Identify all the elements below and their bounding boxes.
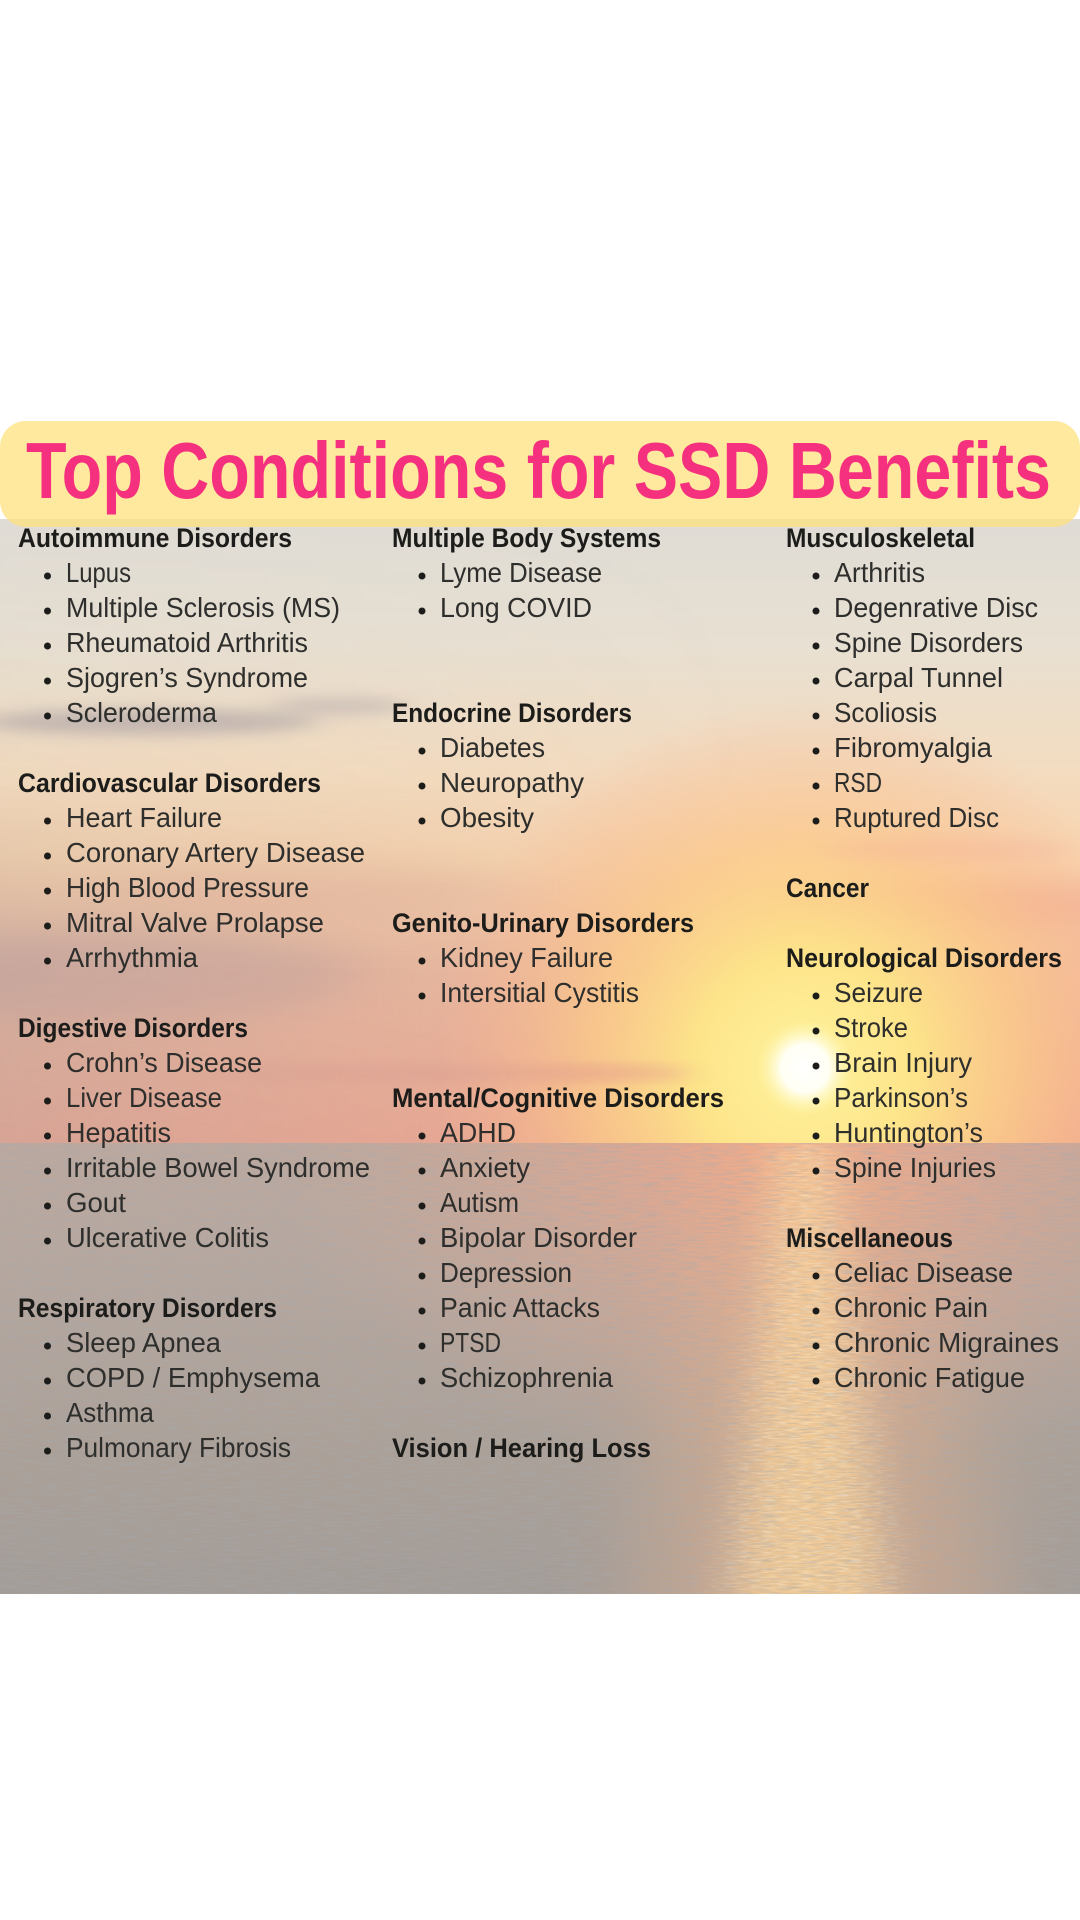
section: mental/cognitive disorders: Bipolar Disorder — [440, 1222, 637, 1253]
section: neurological disorders: Spine Injuries — [834, 1152, 996, 1183]
section: endocrine disorders: Obesity — [440, 802, 534, 833]
section: miscellaneous: Chronic Migraines — [834, 1327, 1059, 1358]
section: neurological disorders: Neurological Disorders — [786, 943, 1062, 973]
section: mental/cognitive disorders: Panic Attacks — [440, 1292, 600, 1323]
section: cardiovascular disorders: Mitral Valve Prolapse — [66, 907, 324, 938]
section: genito-urinary disorders — [392, 908, 694, 1008]
section: autoimmune disorders: Rheumatoid Arthritis — [66, 627, 308, 658]
section: digestive disorders — [18, 1013, 370, 1253]
section: respiratory disorders — [18, 1293, 320, 1463]
section: autoimmune disorders: Multiple Sclerosis (MS) — [66, 592, 340, 623]
sun — [757, 1020, 853, 1116]
section: cardiovascular disorders: Arrhythmia — [66, 942, 198, 973]
section: digestive disorders: Ulcerative Colitis — [66, 1222, 269, 1253]
banner background — [0, 421, 1080, 527]
section: respiratory disorders: Respiratory Disorders — [18, 1293, 277, 1323]
section: genito-urinary disorders: Intersitial Cystitis — [440, 977, 639, 1008]
sky — [0, 519, 1080, 1143]
section: endocrine disorders: Endocrine Disorders — [392, 698, 632, 728]
section: digestive disorders: Gout — [66, 1187, 126, 1218]
column 3 — [786, 523, 1062, 1393]
section: respiratory disorders: Pulmonary Fibrosis — [66, 1432, 291, 1463]
sea — [0, 1143, 1080, 1620]
section: musculoskeletal: Carpal Tunnel — [834, 662, 1003, 693]
section: cardiovascular disorders: Heart Failure — [66, 802, 222, 833]
section: cardiovascular disorders: High Blood Pressure — [66, 872, 309, 903]
section: musculoskeletal: Spine Disorders — [834, 627, 1023, 658]
column 2 — [392, 523, 724, 1463]
photo: sunset sky and sea — [0, 519, 1080, 1620]
section: musculoskeletal: Fibromyalgia — [834, 732, 992, 763]
section: cancer: Cancer — [786, 873, 869, 903]
section: autoimmune disorders: Lupus — [66, 557, 131, 588]
section: multiple body systems: Long COVID — [440, 592, 592, 623]
section: musculoskeletal: Scoliosis — [834, 697, 937, 728]
section: neurological disorders: Seizure — [834, 977, 923, 1008]
section: endocrine disorders: Neuropathy — [440, 767, 584, 798]
section: miscellaneous: Chronic Fatigue — [834, 1362, 1025, 1393]
section: mental/cognitive disorders: Autism — [440, 1187, 519, 1218]
section: cardiovascular disorders: Cardiovascular Disorders — [18, 768, 321, 798]
section: mental/cognitive disorders: Mental/Cognitive Disorders — [392, 1083, 724, 1113]
section: musculoskeletal: RSD — [834, 767, 882, 798]
title banner — [0, 421, 1080, 527]
section: musculoskeletal: Musculoskeletal — [786, 523, 975, 553]
section: miscellaneous: Celiac Disease — [834, 1257, 1013, 1288]
section: mental/cognitive disorders: Depression — [440, 1257, 572, 1288]
section: miscellaneous — [786, 1223, 1059, 1393]
section: mental/cognitive disorders: ADHD — [440, 1117, 516, 1148]
section: genito-urinary disorders: Genito-Urinary Disorders — [392, 908, 694, 938]
section: neurological disorders: Stroke — [834, 1012, 908, 1043]
section: musculoskeletal: Degenrative Disc — [834, 592, 1038, 623]
section: musculoskeletal: Ruptured Disc — [834, 802, 999, 833]
section: respiratory disorders: Sleep Apnea — [66, 1327, 221, 1358]
section: neurological disorders — [786, 943, 1062, 1183]
section: cardiovascular disorders — [18, 768, 365, 973]
section: miscellaneous: Chronic Pain — [834, 1292, 988, 1323]
section: mental/cognitive disorders: Schizophrenia — [440, 1362, 613, 1393]
section: multiple body systems: Multiple Body Systems — [392, 523, 661, 553]
section: mental/cognitive disorders — [392, 1083, 724, 1393]
section: respiratory disorders: COPD / Emphysema — [66, 1362, 320, 1393]
section: musculoskeletal: Arthritis — [834, 557, 925, 588]
section: mental/cognitive disorders: PTSD — [440, 1327, 501, 1358]
section: digestive disorders: Digestive Disorders — [18, 1013, 248, 1043]
column 1 — [18, 523, 370, 1463]
section: endocrine disorders: Diabetes — [440, 732, 545, 763]
section: cardiovascular disorders: Coronary Artery Disease — [66, 837, 365, 868]
section: multiple body systems — [392, 523, 661, 623]
section: musculoskeletal — [786, 523, 1038, 833]
section: digestive disorders: Crohn’s Disease — [66, 1047, 262, 1078]
section: multiple body systems: Lyme Disease — [440, 557, 602, 588]
section: genito-urinary disorders: Kidney Failure — [440, 942, 613, 973]
section: miscellaneous: Miscellaneous — [786, 1223, 953, 1253]
section: vision / hearing loss: Vision / Hearing Loss — [392, 1433, 651, 1463]
section: digestive disorders: Hepatitis — [66, 1117, 171, 1148]
section: neurological disorders: Brain Injury — [834, 1047, 972, 1078]
section: digestive disorders: Irritable Bowel Syndrome — [66, 1152, 370, 1183]
section: respiratory disorders: Asthma — [66, 1397, 154, 1428]
section: autoimmune disorders: Scleroderma — [66, 697, 217, 728]
section: neurological disorders: Huntington’s — [834, 1117, 983, 1148]
section: autoimmune disorders: Sjogren’s Syndrome — [66, 662, 308, 693]
section: autoimmune disorders — [18, 523, 340, 728]
section: neurological disorders: Parkinson’s — [834, 1082, 968, 1113]
section: endocrine disorders — [392, 698, 632, 833]
section: mental/cognitive disorders: Anxiety — [440, 1152, 530, 1183]
section: digestive disorders: Liver Disease — [66, 1082, 222, 1113]
section: autoimmune disorders: Autoimmune Disorders — [18, 523, 292, 553]
